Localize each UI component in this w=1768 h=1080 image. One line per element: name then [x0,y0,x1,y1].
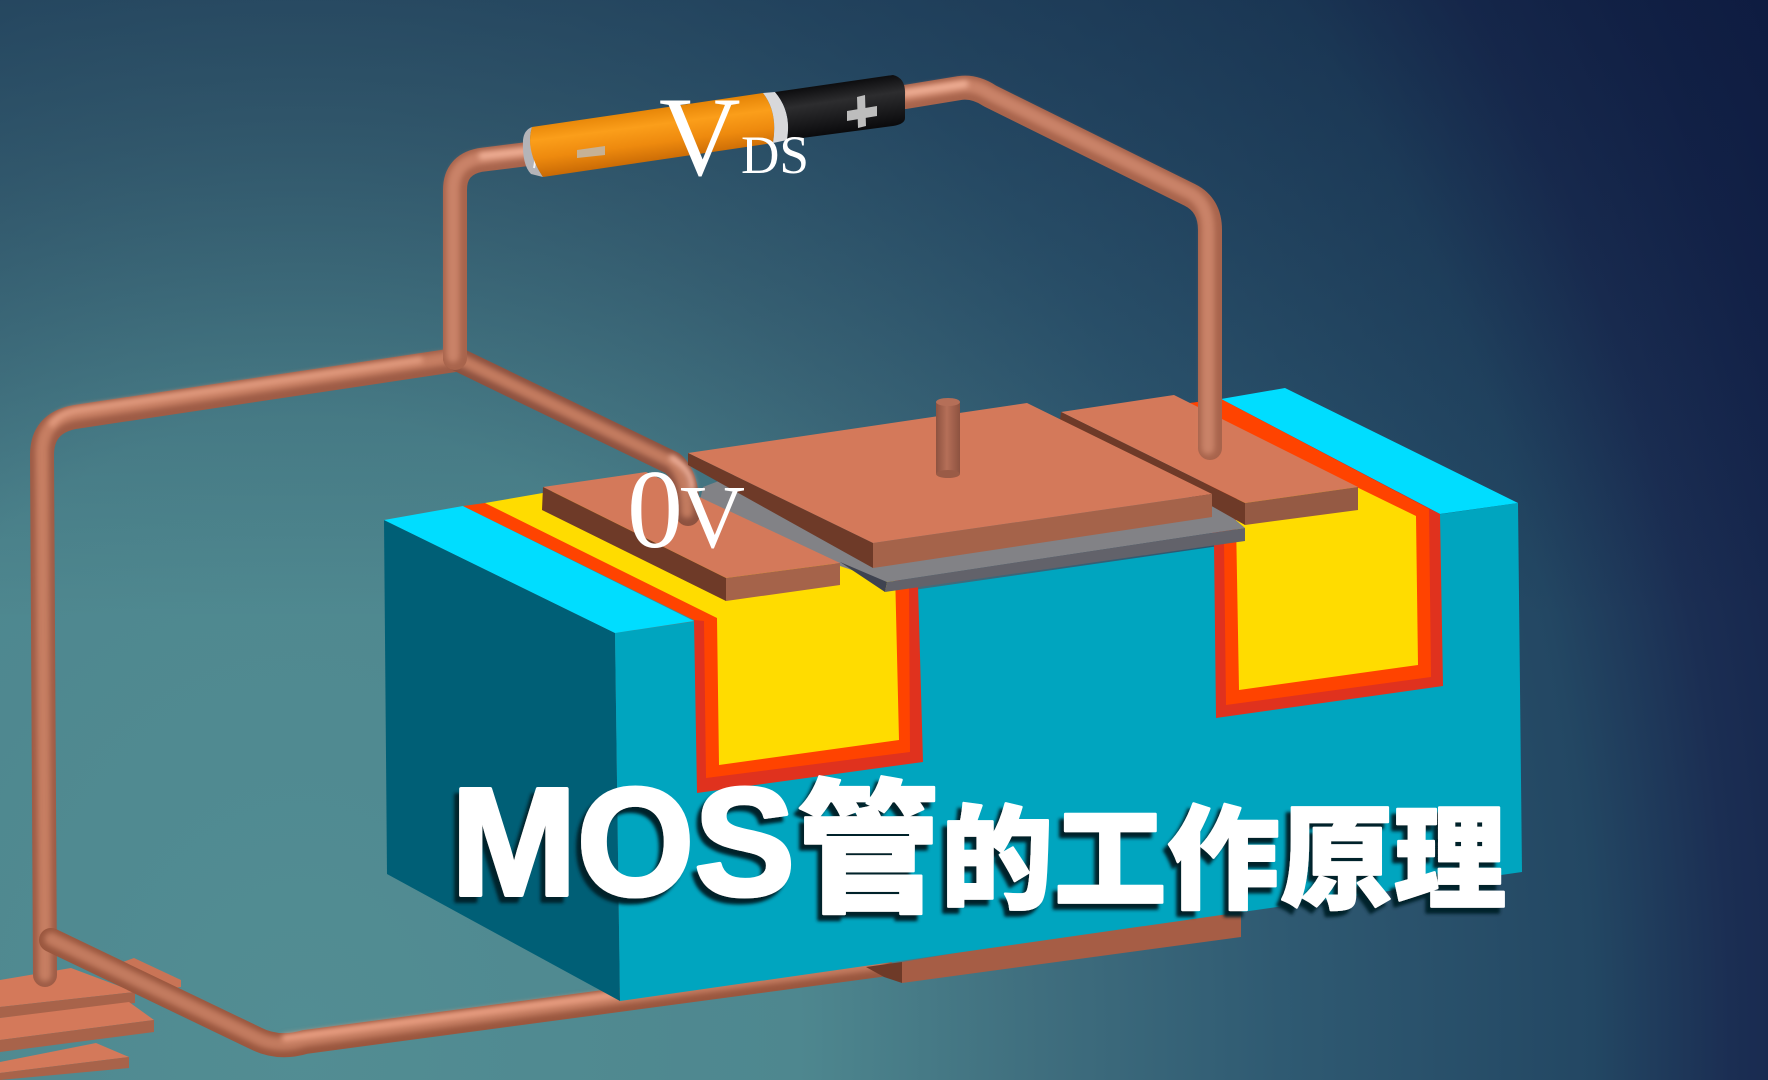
electrode B [0,1002,154,1040]
lower wire behind the block [51,939,880,1045]
circuit wires upper [453,84,1210,448]
gate pin [936,398,960,478]
left doped well [463,490,923,793]
title: MOS [451,756,795,928]
battery end cap [523,127,543,177]
wire: battery negative to junction [455,153,536,358]
battery terminal hole [533,140,535,168]
label: 0V [627,448,745,572]
background top shading [0,0,1768,620]
right yellow region [1236,430,1418,690]
left source electrode [542,472,840,601]
gate electrode [688,403,1212,568]
label: VDS [659,75,809,200]
battery silver ring [763,92,788,143]
left yellow region [485,490,899,765]
wire: battery positive to drain [905,88,1210,448]
minus sign [577,146,605,158]
title: 的工作原理 [941,798,1506,923]
electrode behind wire [120,958,181,990]
semiconductor block [384,388,1522,1001]
right doped well [1190,399,1443,718]
plus sign [847,95,877,128]
cyan top strip left [384,506,694,633]
label: 0V: 0 [627,448,683,572]
battery black body [775,75,905,140]
cyan top strip right [1221,388,1518,514]
block front face [615,503,1522,1001]
bottom electrode [866,905,1241,983]
electrode C [0,1043,129,1073]
label: VDS: V [659,75,741,200]
bottom-left small electrodes [0,958,181,1080]
right drain electrode [1060,395,1358,525]
label: VDS: DS [741,125,809,185]
battery orange body [530,93,774,177]
block left dark face [384,520,620,1001]
title: 管 [797,772,940,931]
gate oxide layer [700,450,1245,592]
battery [523,75,905,177]
upper wire to source [453,356,692,514]
title [451,756,1506,931]
label: 0V: V [680,468,745,567]
wire: left loop [42,357,455,975]
electrode A [0,968,135,1007]
